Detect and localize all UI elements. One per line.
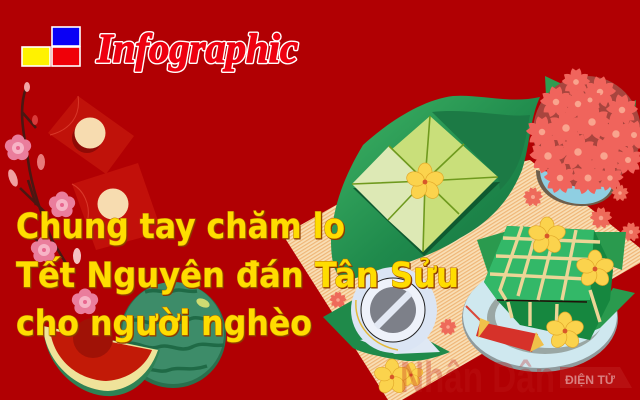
leaf shaded half xyxy=(432,111,530,190)
logo squares xyxy=(22,27,80,66)
placemat xyxy=(283,160,640,400)
banh chung on leaf xyxy=(352,116,500,256)
teapot leaf xyxy=(323,300,450,361)
blossom branch xyxy=(3,82,100,317)
teapot xyxy=(351,267,440,354)
whole watermelon xyxy=(120,282,226,388)
main title xyxy=(16,207,459,344)
plate xyxy=(462,264,618,372)
flower bowl xyxy=(536,170,616,206)
large green leaf xyxy=(331,96,540,281)
pink flower cluster xyxy=(525,68,640,195)
main title: cho người nghèo xyxy=(16,304,312,344)
scroll decoration xyxy=(466,306,544,352)
mat blossoms xyxy=(329,185,640,336)
leaves under banh chung xyxy=(477,226,635,335)
teapot flowers xyxy=(373,359,424,396)
heading: Infographic: Infographic xyxy=(96,25,298,71)
heading: Infographic: Infographic xyxy=(96,25,298,71)
main title: Chung tay chăm lo xyxy=(16,207,345,247)
small green leaves behind flowers xyxy=(545,76,636,128)
red envelope 2 xyxy=(72,163,162,250)
watermark: ĐIỆN TỬ xyxy=(560,367,632,388)
main title: Tết Nguyên đán Tân Sửu xyxy=(16,256,459,296)
watermelon slice xyxy=(43,318,160,396)
banh chung on plate xyxy=(484,217,615,350)
watermark: ĐIỆN TỬ: ĐIỆN TỬ xyxy=(565,372,615,387)
red envelope 1 xyxy=(48,96,134,174)
